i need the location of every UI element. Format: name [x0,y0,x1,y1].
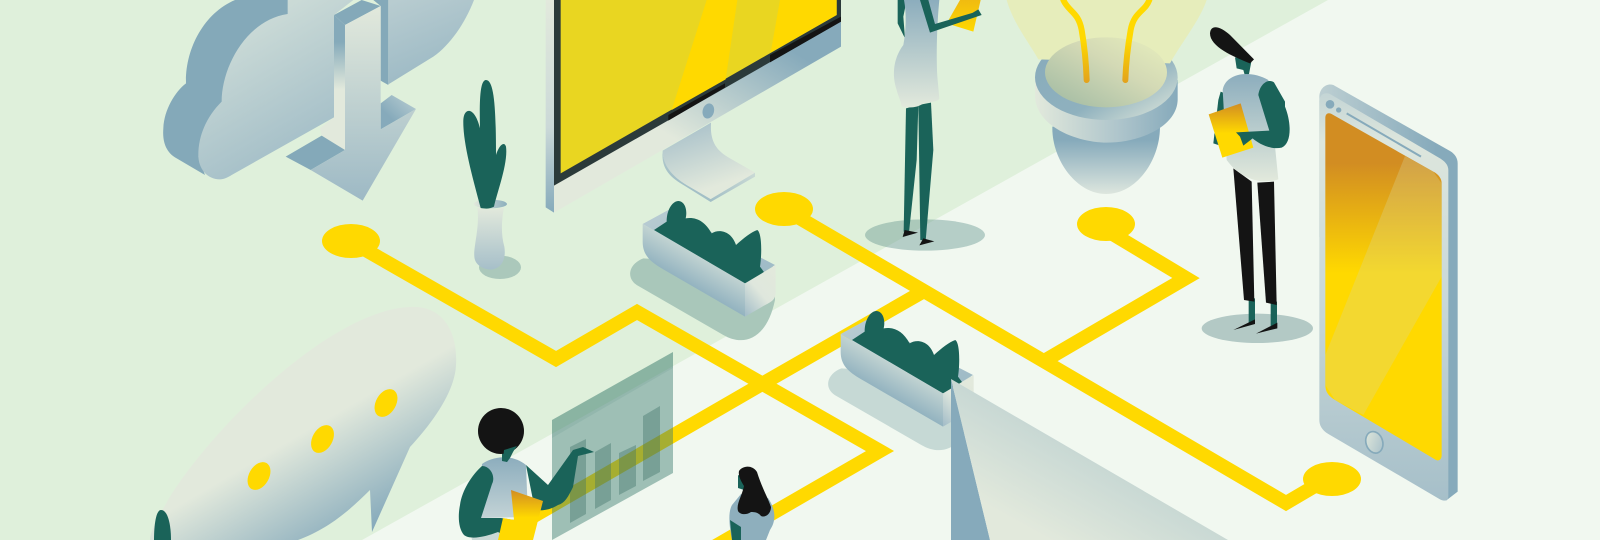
left leg [904,105,918,232]
planter right face [745,265,776,317]
bubble dot middle [306,421,339,457]
connector: centre node to phone node [784,209,1320,503]
sleeve [730,520,741,540]
screen frame [554,0,841,186]
screen frame dark segment right [770,17,841,62]
ankle right [1271,302,1277,328]
screen reflection [1325,156,1442,415]
node: phone [1303,462,1361,496]
arrow top face [334,0,381,25]
screen [561,0,837,173]
planter 1 [630,201,776,340]
trouser right [1257,182,1277,305]
monitor side edge [546,0,554,213]
planter left face [643,224,745,317]
cone face [951,379,1228,540]
body [729,494,774,540]
filament right [1125,0,1149,80]
monitor bezel [554,0,841,213]
shoe left [903,230,918,237]
neck [502,446,516,462]
node: left [322,224,380,258]
screen light streak [672,0,737,110]
arrow shaft side [334,15,345,150]
folder [1209,103,1253,158]
planter leaves [654,201,765,283]
dress [894,0,939,107]
arrow head top [381,95,416,129]
folder [498,490,543,540]
speaker dot large [1326,100,1334,109]
torso [480,457,528,518]
phone screen [1325,113,1442,460]
figure: person with afro pointing at chart [459,408,594,540]
icon: potted plant [463,80,521,279]
monitor stand foot side [662,151,755,202]
planter leaves [852,311,963,393]
rear arm [1213,92,1225,147]
ground shadow [865,219,985,251]
bubble dot right [370,385,402,421]
icon: light bulb [1007,0,1207,194]
ground shadow [1202,314,1313,343]
arrow front [311,6,416,201]
bulb glow [1007,0,1207,63]
connector: bulb node to main line [1044,230,1186,361]
icon: cloud with download arrow [163,0,474,201]
home button [1363,429,1386,455]
afro hair [478,408,524,454]
cloud front left [198,0,353,179]
phone body side [1319,84,1458,501]
bar 4 [643,406,660,481]
neck and face [1235,57,1252,76]
speech bubble [150,307,456,540]
ankle left [1249,298,1255,325]
node: bulb [1077,207,1135,241]
left arm [459,466,514,538]
bubble dot left [243,458,275,494]
cloud sliver behind arrow [373,0,388,85]
screen light streak right [771,0,837,53]
back arm [898,0,907,38]
chart glass [552,352,673,540]
planter right face [943,375,974,427]
plant leaf at bottom edge [154,510,171,540]
right arm [526,447,594,510]
front arm [920,0,982,33]
icon: desktop monitor [546,0,841,213]
vase rim [474,200,507,208]
connector: left node to lower junction [350,241,880,540]
cloud front right [388,0,474,84]
planter left face [841,334,943,427]
torso [1223,74,1278,181]
screen frame dark segment [668,83,725,121]
face [738,475,745,490]
folder [947,0,981,32]
arrow head underside [286,136,345,170]
filament left [1063,0,1087,80]
webcam dot [701,102,716,120]
neck front [503,446,517,462]
arrow light inner [320,117,345,150]
planter inner wall [841,320,973,393]
cloud back layer [163,0,290,175]
speaker dot small [1336,107,1341,113]
cone shape [951,379,1228,540]
planter shadow [828,368,973,450]
lower torso [470,530,500,540]
hair [1210,27,1254,63]
connector: branch through crossing [470,291,924,540]
shoe right [1256,323,1277,334]
cone side [951,379,990,540]
bubble body [150,307,456,540]
bar chart panel [552,352,673,540]
front arm [1236,81,1290,148]
planter shadow [630,258,775,340]
figure: person with black trousers [1202,27,1313,343]
hair [738,467,771,517]
yellow connector network [350,209,1320,540]
node: centre [755,192,813,226]
plant leaves [463,80,506,209]
figure: standing person with folder [865,0,985,251]
bar 2 [595,443,611,509]
vase body [474,207,505,270]
monitor stand [663,123,755,199]
icon: smartphone [1319,84,1458,501]
phone front [1319,93,1448,501]
trouser left [1233,168,1254,302]
bar 1 [570,439,586,523]
socket interior [1045,37,1167,107]
planter inner wall [643,210,775,283]
chart header band [552,352,673,438]
socket cup [1052,127,1160,194]
speaker bar [1347,113,1421,157]
planter 2 [828,311,974,450]
background: light diagonal floor [362,0,1600,540]
shoe right [919,238,934,245]
vase shadow [479,256,521,279]
socket rim [1035,35,1178,120]
figure: woman with long hair [729,467,774,540]
bar 3 [619,445,636,495]
right leg [918,103,933,241]
socket band [1035,78,1178,143]
shoe left [1233,319,1255,330]
